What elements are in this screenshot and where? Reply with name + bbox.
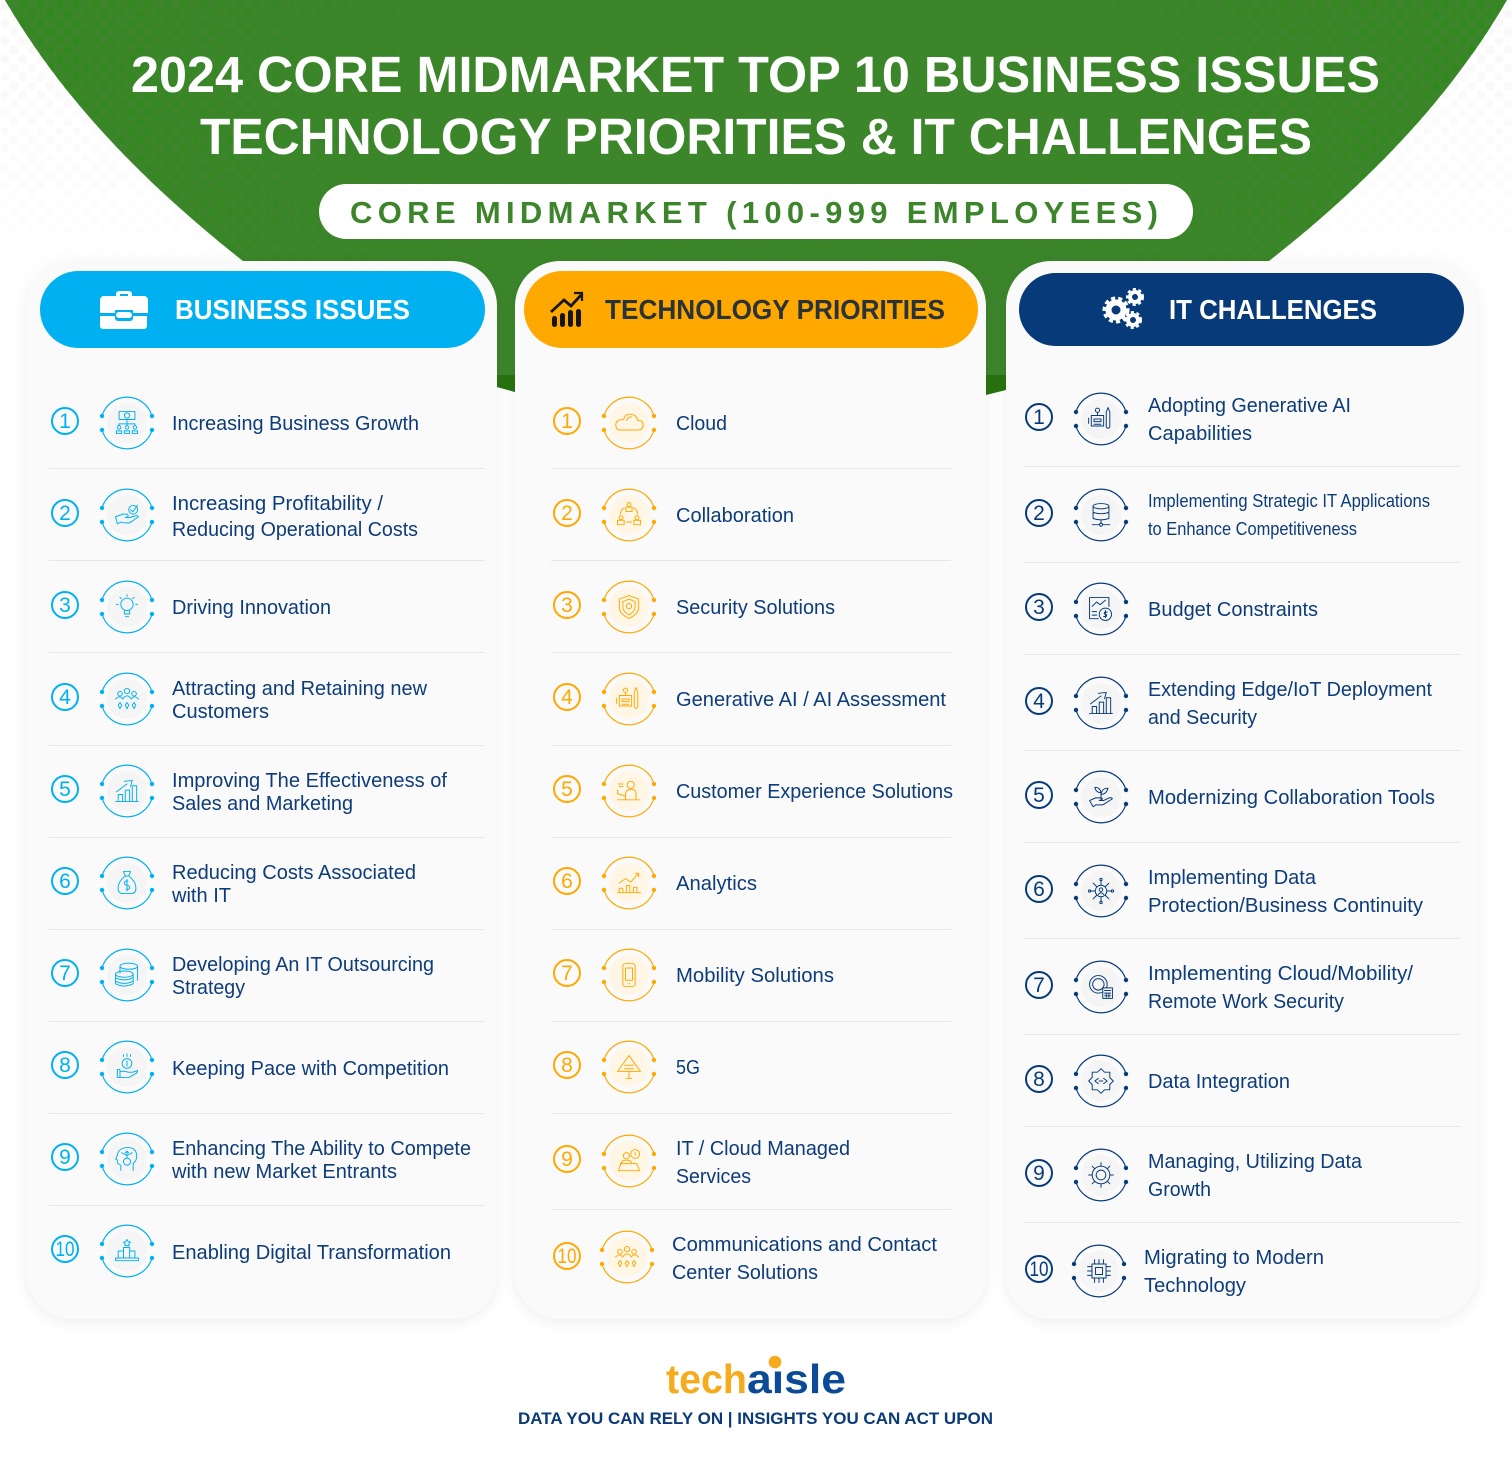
- header: business issues: [40, 271, 485, 348]
- item 6: Reducing Costs Associated: [172, 862, 416, 884]
- item 10: Migrating to Modern: [1144, 1247, 1324, 1269]
- item 1: 1: [1033, 406, 1045, 429]
- icon: AI robot: [1074, 393, 1128, 445]
- item 3: [554, 581, 835, 633]
- item 1: Capabilities: [1148, 423, 1252, 445]
- item 10: Technology: [1144, 1275, 1246, 1297]
- item 9: Growth: [1148, 1179, 1211, 1201]
- header: business issues: BUSINESS ISSUES: [175, 294, 410, 325]
- icon: shield: [602, 581, 656, 633]
- item 1: [1026, 393, 1351, 445]
- item 4: 4: [59, 686, 71, 709]
- item 8: 8: [1033, 1068, 1045, 1091]
- item 6: Analytics: [676, 873, 757, 895]
- item 3: Driving Innovation: [172, 597, 331, 619]
- item 2: Increasing Profitability /: [172, 493, 383, 515]
- item 8: 8: [561, 1054, 573, 1077]
- item 8: Keeping Pace with Competition: [172, 1058, 449, 1080]
- tagline: DATA YOU CAN RELY ON | INSIGHTS YOU CAN ACT UPON: [518, 1409, 993, 1428]
- item 2: to Enhance Competitiveness: [1148, 518, 1357, 539]
- item 5: Sales and Marketing: [172, 793, 353, 815]
- subtitle pill: [319, 184, 1193, 239]
- item 8: [1026, 1055, 1290, 1107]
- icon: sales chart: [100, 765, 154, 817]
- item 3: Security Solutions: [676, 597, 835, 619]
- item 7: 7: [1033, 974, 1045, 997]
- item 6: [1026, 865, 1423, 917]
- item 4: 4: [561, 686, 573, 709]
- item 4: [1026, 677, 1432, 729]
- item 9: Managing, Utilizing Data: [1148, 1151, 1363, 1173]
- item 5: [52, 765, 447, 817]
- item 9: IT / Cloud Managed: [676, 1138, 850, 1160]
- item 5: 5: [1033, 784, 1045, 807]
- panel: business issues: [27, 261, 497, 1319]
- icon: cloud: [602, 397, 656, 449]
- item 2: Collaboration: [676, 505, 794, 527]
- item 9: [1026, 1149, 1363, 1201]
- item 6: [554, 857, 757, 909]
- icon: coin stack: [100, 949, 154, 1001]
- item 1: Cloud: [676, 413, 727, 435]
- item 6: 6: [561, 870, 573, 893]
- icon: briefcase: [100, 291, 148, 329]
- header: IT challenges: [1019, 273, 1464, 346]
- icon: growth chart: [1074, 677, 1128, 729]
- item 9: 9: [59, 1146, 71, 1169]
- item 1: [52, 397, 419, 449]
- header: technology priorities: [524, 271, 978, 348]
- icon: hand with check: [100, 489, 154, 541]
- item 3: 3: [59, 594, 71, 617]
- item 3: [1026, 583, 1318, 635]
- green header shape: [0, 0, 1512, 410]
- item 2: Implementing Strategic IT Applications: [1148, 490, 1430, 511]
- panel: IT challenges: [1006, 261, 1477, 1319]
- item 7: Remote Work Security: [1148, 991, 1344, 1013]
- header: IT challenges: IT CHALLENGES: [1169, 294, 1377, 325]
- item 4: and Security: [1148, 707, 1257, 729]
- item 3: 3: [561, 594, 573, 617]
- title: TECHNOLOGY PRIORITIES & IT CHALLENGES: [200, 108, 1312, 165]
- icon: coin and calculator: [1074, 961, 1128, 1013]
- item 7: 7: [59, 962, 71, 985]
- icon: AI robot: [602, 673, 656, 725]
- item 10: 10: [1030, 1258, 1048, 1281]
- item 4: Extending Edge/IoT Deployment: [1148, 679, 1432, 701]
- item 7: Developing An IT Outsourcing: [172, 954, 434, 976]
- item 7: Implementing Cloud/Mobility/: [1148, 963, 1413, 985]
- item 5: Modernizing Collaboration Tools: [1148, 787, 1435, 809]
- item 4: [52, 673, 428, 725]
- icon: contact center: [600, 1231, 654, 1283]
- item 1: 1: [561, 410, 573, 433]
- item 7: [554, 949, 834, 1001]
- item 2: 2: [1033, 502, 1045, 525]
- icon: head with arrows: [100, 1133, 154, 1185]
- title: [131, 46, 1380, 165]
- item 1: 1: [59, 410, 71, 433]
- item 8: 5G: [676, 1057, 700, 1079]
- icon: growth chart: [551, 293, 582, 327]
- item 9: 9: [1033, 1162, 1045, 1185]
- icon: gears: [1104, 290, 1142, 328]
- logo: techaisle: aisle: [747, 1356, 846, 1402]
- item 5: 5: [561, 778, 573, 801]
- item 5: Customer Experience Solutions: [676, 781, 953, 803]
- item 10: Communications and Contact: [672, 1234, 937, 1256]
- logo: techaisle: [666, 1354, 846, 1402]
- item 3: 3: [1033, 596, 1045, 619]
- item 1: [554, 397, 727, 449]
- item 6: Protection/Business Continuity: [1148, 895, 1423, 917]
- item 5: Improving The Effectiveness of: [172, 770, 447, 792]
- item 9: Services: [676, 1166, 751, 1188]
- item 10: 10: [558, 1245, 576, 1268]
- item 9: with new Market Entrants: [171, 1161, 397, 1183]
- item 7: 7: [561, 962, 573, 985]
- icon: customers: [100, 673, 154, 725]
- icon: data network: [1074, 865, 1128, 917]
- item 9: [554, 1135, 850, 1188]
- item 2: [52, 489, 418, 541]
- item 3: [52, 581, 331, 633]
- subtitle pill: CORE MIDMARKET (100-999 EMPLOYEES): [350, 195, 1158, 230]
- icon: customer service: [602, 765, 656, 817]
- item 4: Attracting and Retaining new: [172, 678, 428, 700]
- icon: integration gear: [1074, 1055, 1128, 1107]
- item 7: Strategy: [172, 977, 245, 999]
- title: 2024 CORE MIDMARKET TOP 10 BUSINESS ISSUES: [131, 46, 1380, 103]
- icon: money hierarchy: [100, 397, 154, 449]
- icon: mobile phone: [602, 949, 656, 1001]
- icon: hand with plant: [1074, 771, 1128, 823]
- icon: light bulb: [100, 581, 154, 633]
- icon: gear: [1074, 1149, 1128, 1201]
- item 5: [554, 765, 953, 817]
- background dot pattern: [0, 0, 1512, 300]
- item 1: Increasing Business Growth: [172, 413, 419, 435]
- item 9: [52, 1133, 471, 1185]
- item 6: Implementing Data: [1148, 867, 1317, 889]
- item 10: [52, 1225, 451, 1277]
- logo: techaisle: tech: [666, 1356, 747, 1402]
- item 3: Budget Constraints: [1148, 599, 1318, 621]
- icon: managed services: [602, 1135, 656, 1187]
- item 6: 6: [1033, 878, 1045, 901]
- item 8: [554, 1041, 700, 1093]
- item 6: [52, 857, 416, 909]
- item 7: Mobility Solutions: [676, 965, 834, 987]
- item 10: Center Solutions: [672, 1262, 818, 1284]
- item 2: [554, 489, 794, 541]
- item 7: [52, 949, 434, 1001]
- item 4: Generative AI / AI Assessment: [676, 689, 946, 711]
- item 2: 2: [561, 502, 573, 525]
- item 10: [1026, 1245, 1324, 1297]
- item 2: Reducing Operational Costs: [172, 519, 418, 541]
- item 2: 2: [59, 502, 71, 525]
- icon: money bag: [100, 857, 154, 909]
- item 8: [52, 1041, 449, 1093]
- icon: hand with coin: [100, 1041, 154, 1093]
- item 9: Enhancing The Ability to Compete: [172, 1138, 471, 1160]
- item 5: [1026, 771, 1435, 823]
- item 6: 6: [59, 870, 71, 893]
- item 2: [1026, 489, 1430, 541]
- item 5: 5: [59, 778, 71, 801]
- icon: podium: [100, 1225, 154, 1277]
- icon: collaboration: [602, 489, 656, 541]
- icon: 5G tower: [602, 1041, 656, 1093]
- item 8: Data Integration: [1148, 1071, 1290, 1093]
- item 4: [554, 673, 946, 725]
- icon: microchip: [1072, 1245, 1126, 1297]
- icon: analytics: [602, 857, 656, 909]
- icon: database server: [1074, 489, 1128, 541]
- item 1: Adopting Generative AI: [1148, 395, 1351, 417]
- item 10: [554, 1231, 937, 1284]
- item 9: 9: [561, 1148, 573, 1171]
- item 8: 8: [59, 1054, 71, 1077]
- panel: technology priorities: [515, 261, 986, 1319]
- item 7: [1026, 961, 1413, 1013]
- item 10: 10: [56, 1238, 74, 1261]
- header: technology priorities: TECHNOLOGY PRIORITIES: [605, 294, 945, 325]
- item 4: Customers: [172, 701, 269, 723]
- item 10: Enabling Digital Transformation: [172, 1242, 451, 1264]
- item 6: with IT: [171, 885, 231, 907]
- icon: budget document: [1074, 583, 1128, 635]
- item 4: 4: [1033, 690, 1045, 713]
